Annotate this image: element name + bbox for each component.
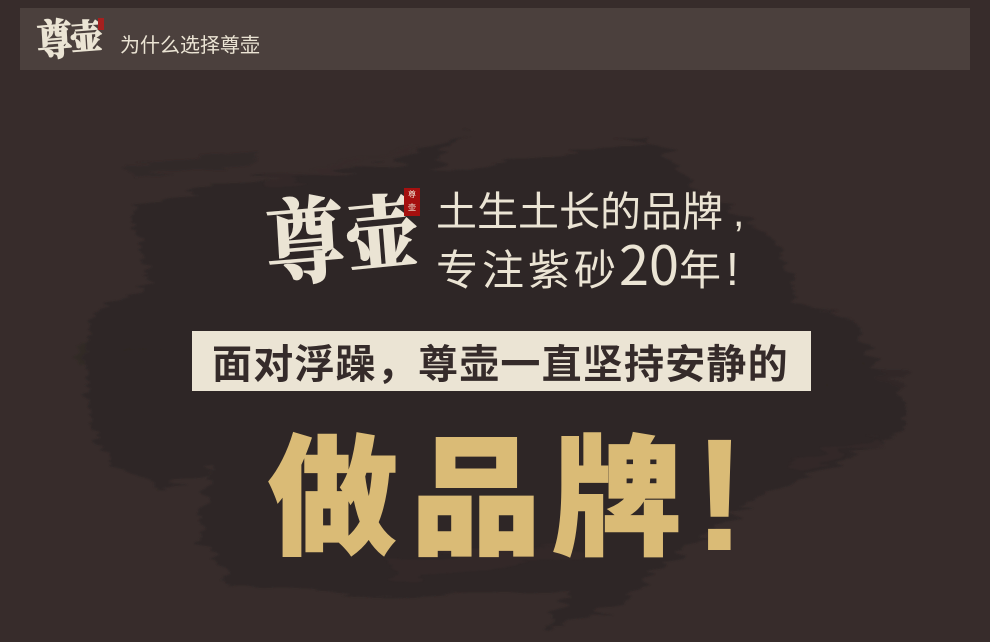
slogan line 2: 专注紫砂20年! <box>436 222 743 301</box>
slogan text <box>436 178 744 301</box>
main logo red seal <box>404 188 420 216</box>
header red seal <box>98 18 104 30</box>
main logo <box>262 166 421 306</box>
main logo red seal: 壶 <box>408 203 416 212</box>
headline character pin: 品 <box>411 394 541 582</box>
main logo red seal: 尊 <box>408 190 416 199</box>
headline character zuo: 做 <box>268 394 398 582</box>
header title: 为什么选择尊壶 <box>120 35 260 57</box>
main logo character hu: 壶 <box>341 166 421 290</box>
headline character pai: 牌 <box>552 394 682 582</box>
header logo <box>35 6 104 70</box>
main logo character zun: 尊 <box>262 166 348 306</box>
top header bar <box>20 8 970 70</box>
headline exclamation mark: ! <box>693 405 746 584</box>
slogan line 1: 土生土长的品牌, <box>436 178 744 238</box>
banner text: 面对浮躁，尊壶一直坚持安静的 <box>212 332 789 390</box>
header logo character zun: 尊 <box>35 6 74 70</box>
header logo character hu: 壶 <box>68 9 104 61</box>
cream subtitle banner <box>192 331 811 391</box>
main gold headline <box>268 394 746 584</box>
